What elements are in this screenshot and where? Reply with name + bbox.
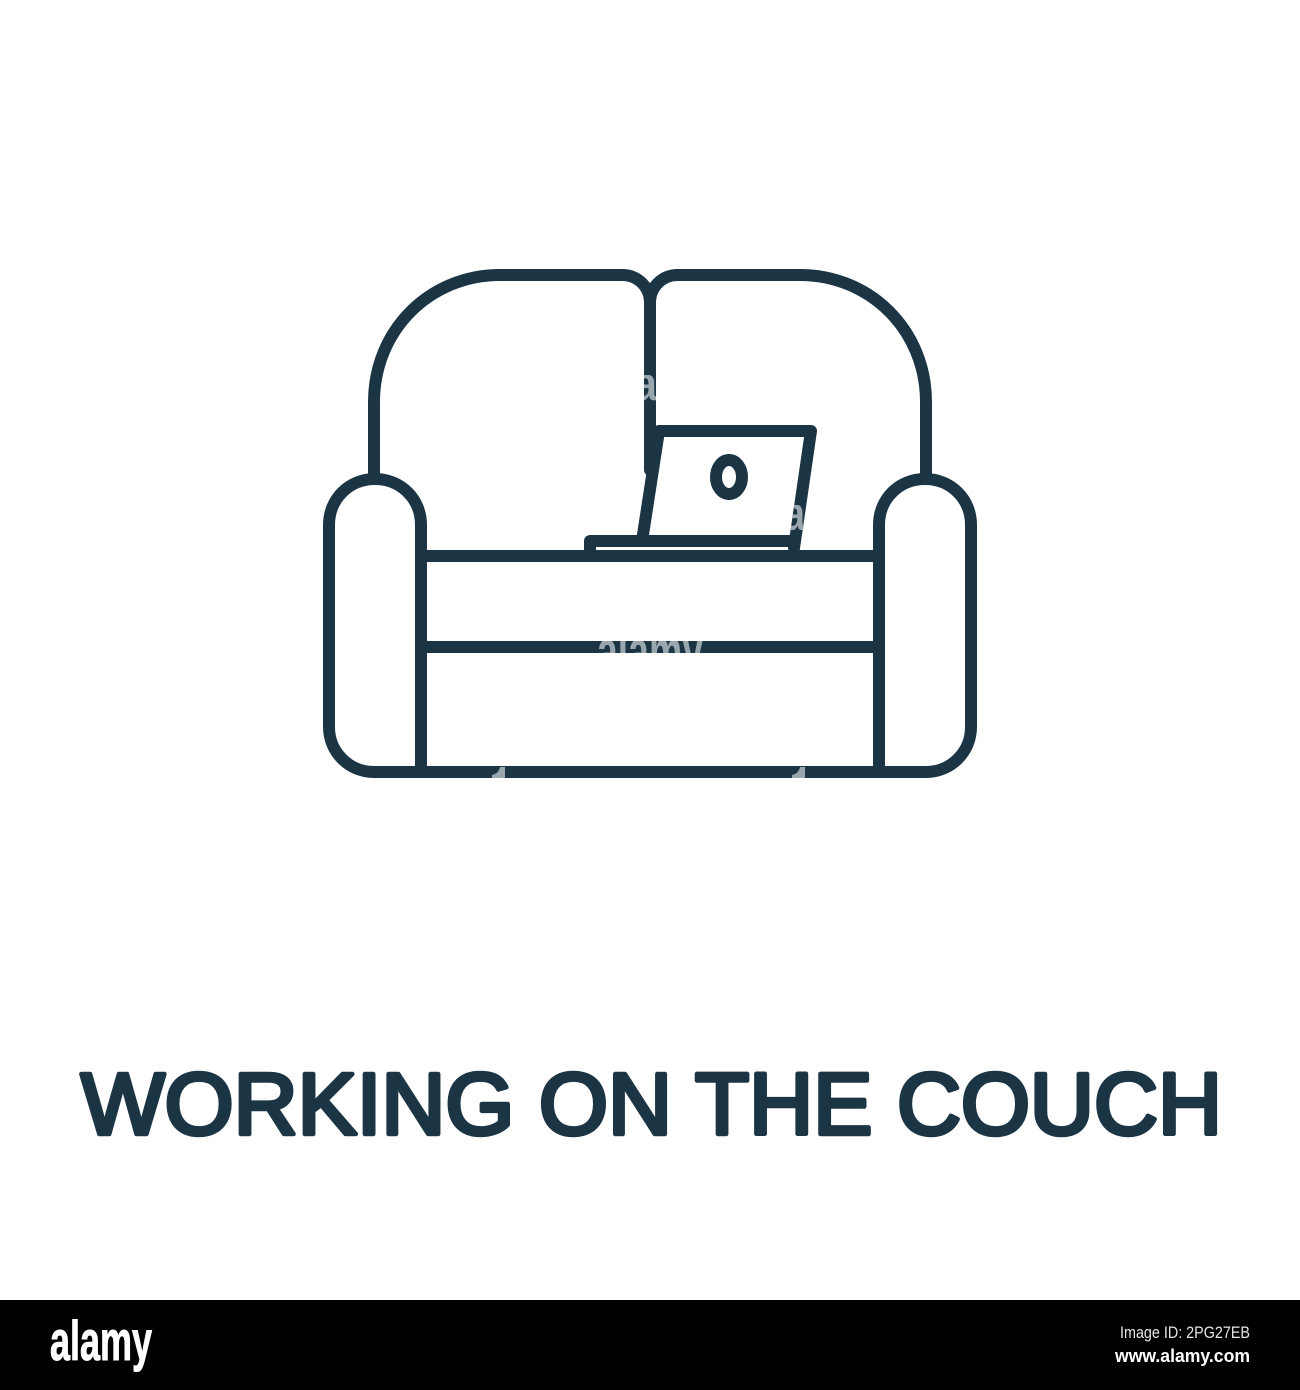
couch right back cushion (650, 275, 926, 476)
watermark fragments (492, 358, 805, 778)
laptop screen (642, 431, 811, 548)
title: WORKING ON THE COUCH (81, 1056, 1222, 1153)
icon: laptop (590, 431, 811, 554)
image id: Image ID: 2PG27EB (1120, 1323, 1250, 1342)
icon: couch with laptop (329, 275, 971, 772)
watermark fragments: a (784, 488, 805, 541)
watermark fragments: a (634, 358, 657, 411)
footer logo: alamy (50, 1309, 152, 1372)
footer bar (0, 1300, 1300, 1390)
couch left arm (329, 479, 421, 772)
couch left back cushion (374, 275, 650, 476)
laptop base (590, 541, 794, 554)
laptop logo (716, 460, 742, 494)
website: www.alamy.com (1114, 1346, 1250, 1366)
couch seat cushion and front (421, 556, 879, 772)
couch right arm (879, 479, 971, 772)
watermark fragments: alamy (597, 618, 703, 685)
